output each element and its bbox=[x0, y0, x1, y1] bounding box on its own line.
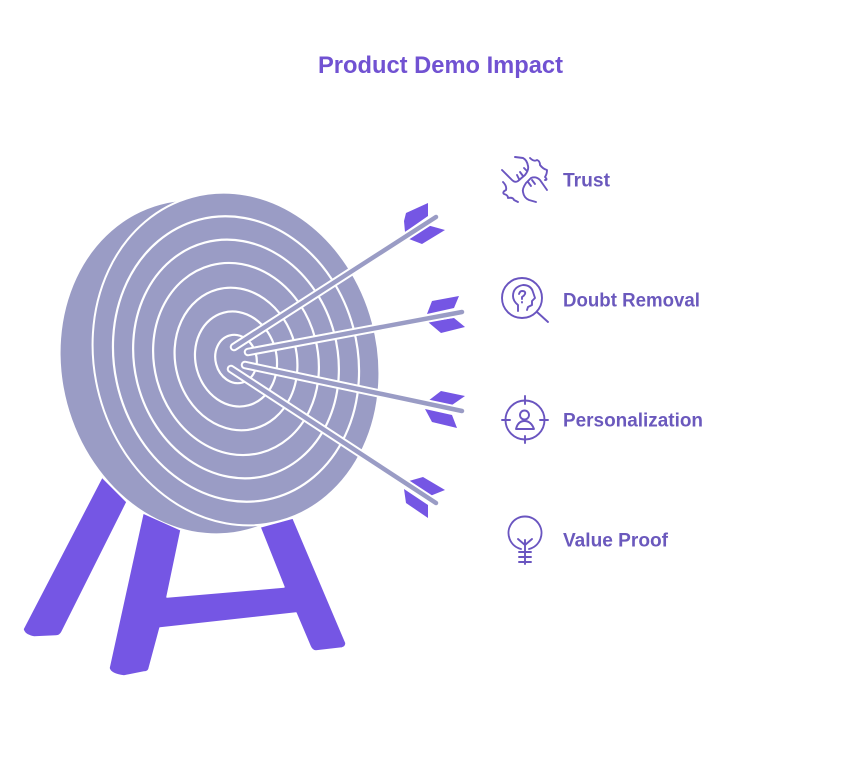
icon: person in crosshair bbox=[502, 396, 548, 443]
left leg bbox=[23, 477, 127, 637]
item: Personalization bbox=[502, 396, 703, 443]
title: Product Demo Impact bbox=[318, 52, 563, 79]
board back edge bbox=[24, 168, 384, 566]
label: Doubt Removal bbox=[563, 290, 700, 312]
arrow 4 bbox=[231, 369, 445, 518]
shaft bbox=[248, 312, 462, 352]
icon: clasped hands bbox=[502, 157, 547, 202]
arrow 2 bbox=[248, 296, 465, 352]
fletching bbox=[404, 477, 445, 518]
shaft bbox=[234, 217, 436, 347]
fletching bbox=[427, 296, 465, 333]
arrow 3 bbox=[245, 365, 465, 428]
shaft bbox=[245, 365, 462, 411]
item: Trust bbox=[502, 157, 611, 202]
board front face bbox=[56, 160, 416, 558]
label: Trust bbox=[563, 170, 611, 192]
shaft bbox=[231, 369, 436, 503]
item: Value Proof bbox=[509, 516, 669, 564]
label: Personalization bbox=[563, 410, 703, 432]
arrow 1 bbox=[234, 203, 445, 347]
target stand legs bbox=[23, 477, 346, 676]
front A-frame legs with crossbar bbox=[109, 513, 346, 676]
icon: head with question mark in magnifier bbox=[502, 278, 548, 322]
target board bbox=[24, 160, 416, 566]
label: Value Proof bbox=[563, 530, 669, 552]
icon: light bulb bbox=[509, 516, 542, 564]
fletching bbox=[425, 391, 465, 428]
fletching bbox=[404, 203, 445, 244]
item: Doubt Removal bbox=[502, 278, 700, 322]
target rings bbox=[81, 188, 391, 530]
